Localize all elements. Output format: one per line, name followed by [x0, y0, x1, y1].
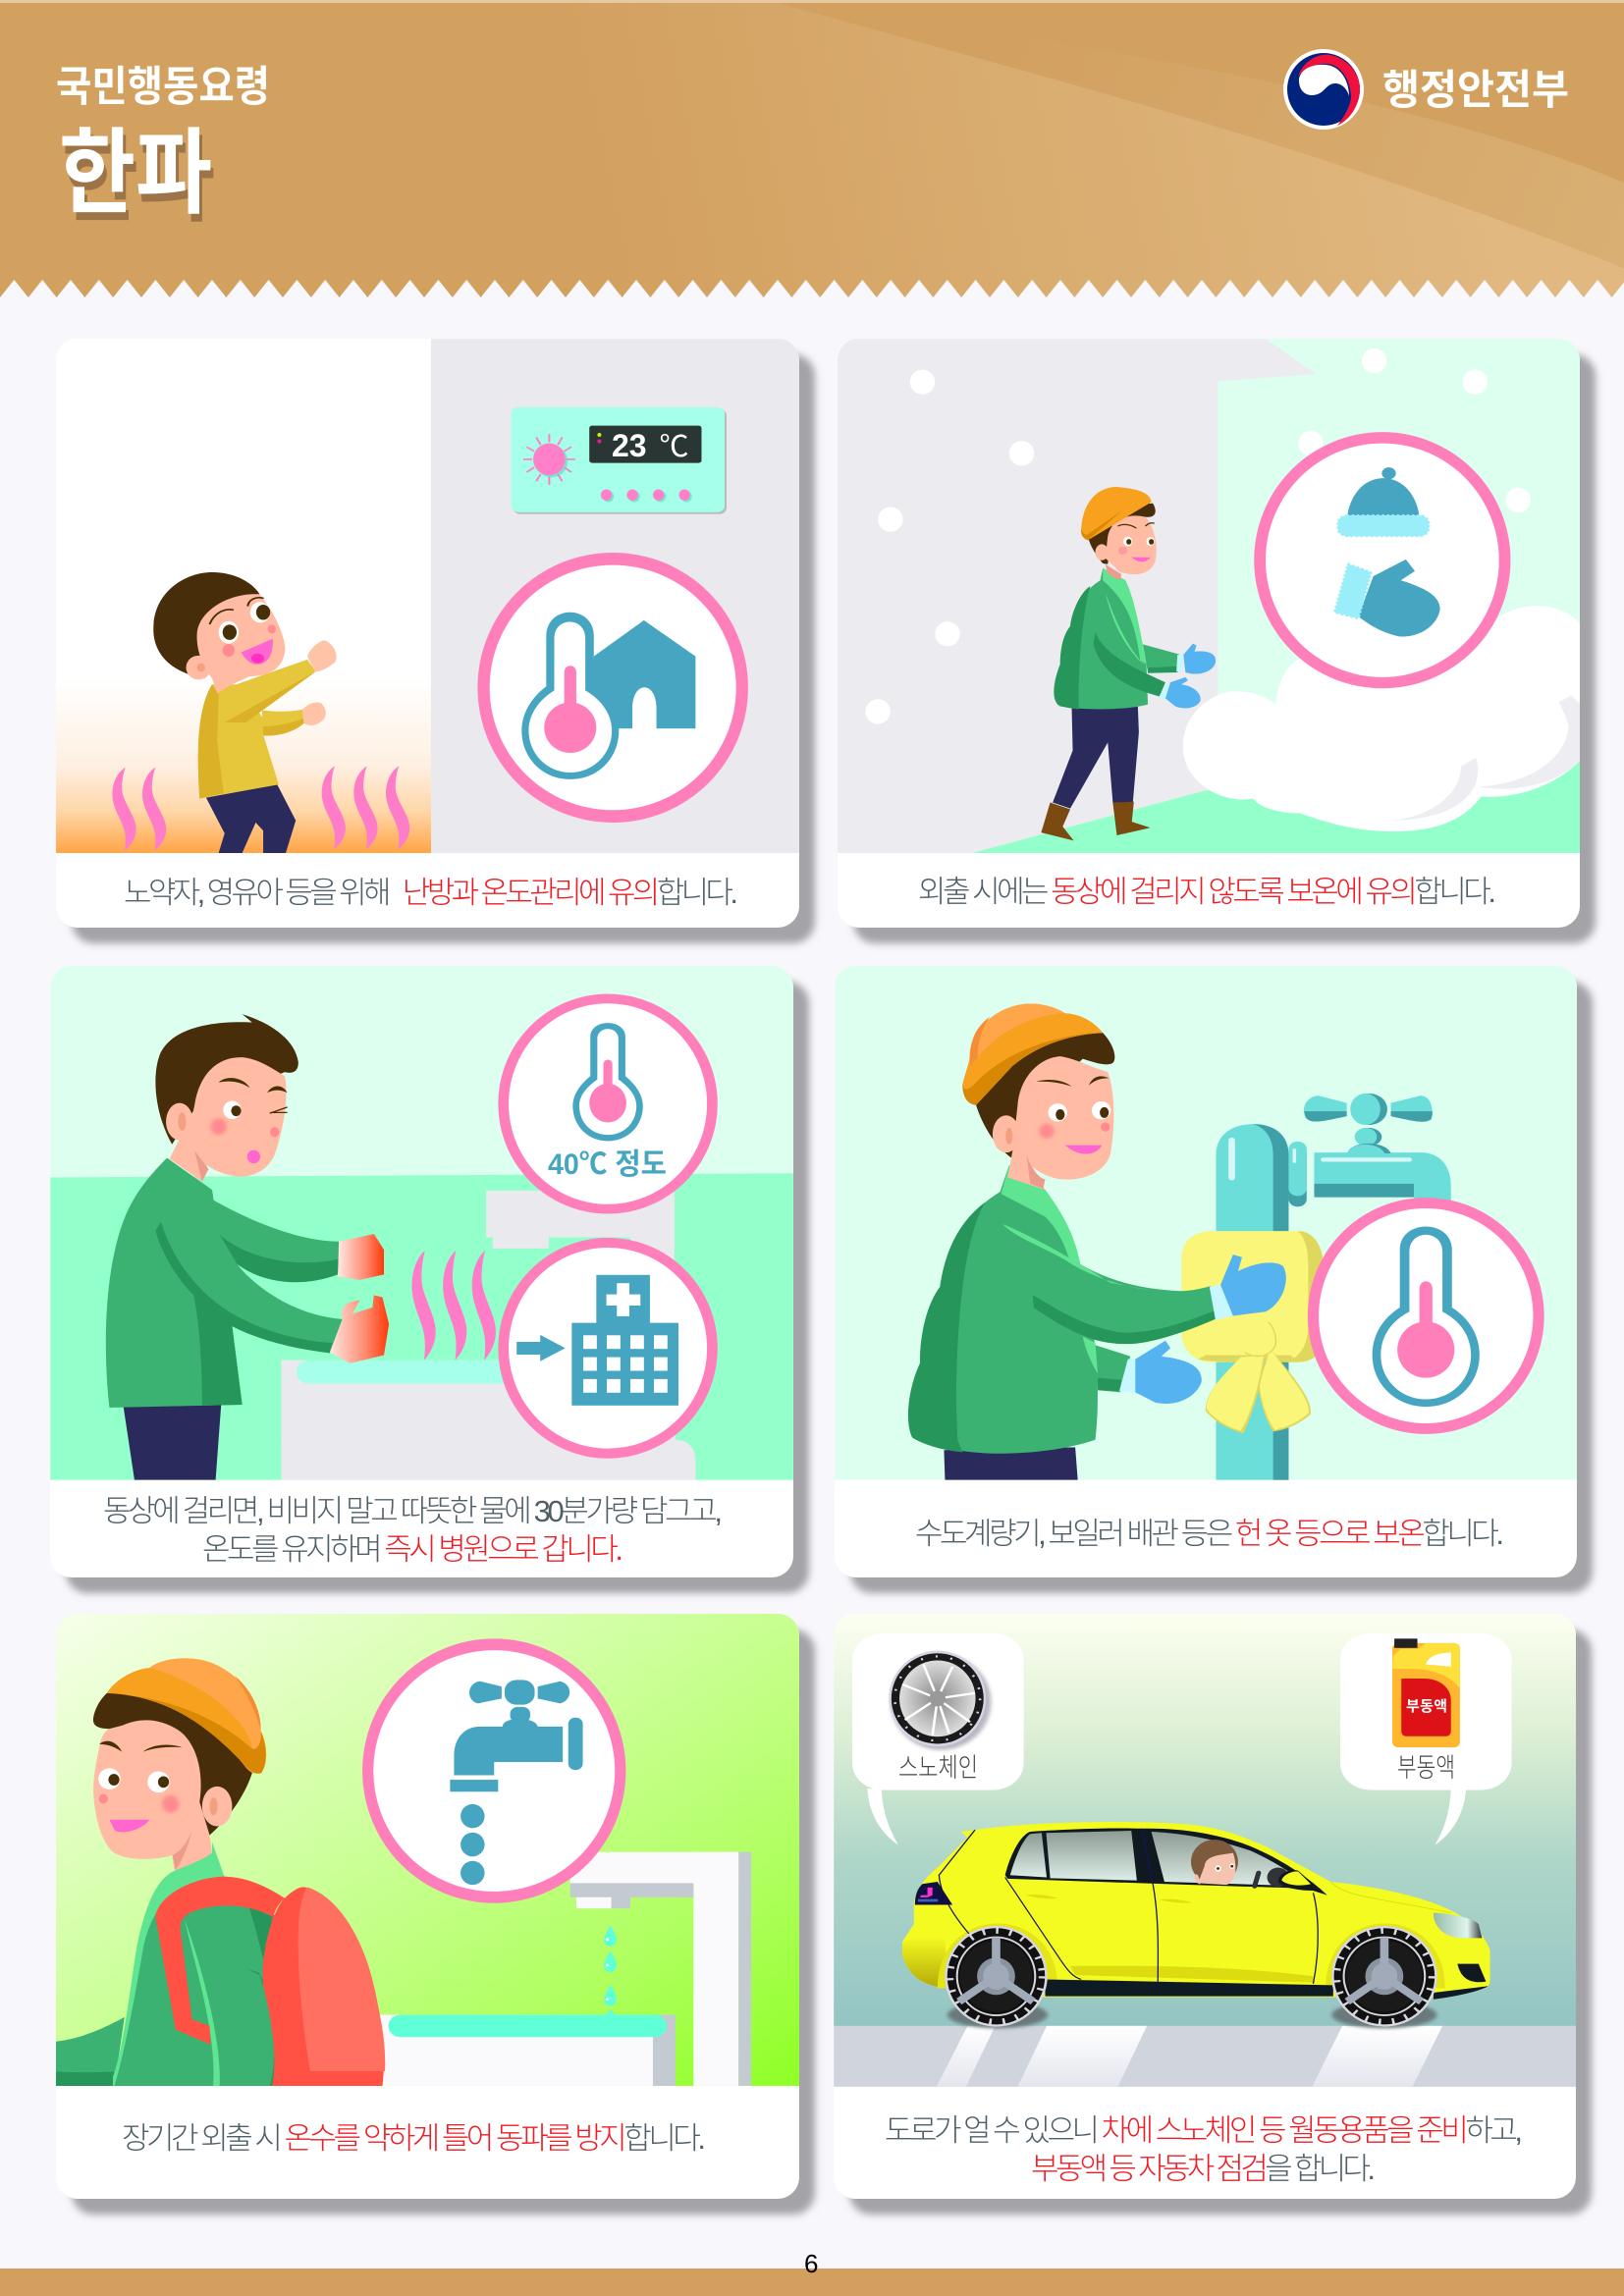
icon: thermometer — [1308, 1198, 1544, 1434]
driver — [1191, 1840, 1238, 1885]
caption: 장기간 외출 시 온수를 약하게 틀어 동파를 방지합니다. — [122, 2121, 706, 2156]
icon: hat and mitten — [1254, 432, 1510, 688]
illustration: person in warm room — [56, 339, 799, 853]
icon: dripping faucet — [362, 1638, 625, 1903]
title with shadow: 한파 — [59, 122, 212, 226]
caption: 노약자, 영유아 등을 위해 난방과 온도관리에 유의합니다. — [124, 876, 738, 910]
character: winking person — [106, 1014, 389, 1480]
illustration: wrapping a pipe — [835, 966, 1578, 1480]
character: person with red backpack — [56, 1658, 385, 2086]
illustration: car on snowy road — [834, 1614, 1577, 2087]
thermometer label: 40℃ 정도 — [548, 1148, 667, 1181]
thermostat body — [512, 407, 727, 514]
character: walking person — [1041, 487, 1216, 840]
heat waves — [112, 766, 409, 851]
caption — [103, 1494, 723, 1567]
bottom band — [0, 2269, 1624, 2296]
bottle label text: 부동액 — [1406, 1698, 1447, 1715]
logo: taegeuk mark — [1283, 49, 1364, 130]
panel: hot water trickle — [56, 1614, 815, 2215]
road and crosswalk — [834, 2026, 1577, 2087]
wash basin and faucet — [281, 1191, 695, 1480]
warm water steam — [412, 1251, 496, 1361]
header band — [0, 0, 1624, 297]
page number: 6 — [804, 2249, 818, 2278]
caption: 온도를 유지하며 즉시 병원으로 갑니다. — [202, 1532, 623, 1567]
water drops — [604, 1925, 617, 2005]
title with shadow: 한파 — [62, 130, 215, 234]
panel: heating and temperature — [56, 339, 815, 943]
wheels with snow chains — [945, 1926, 1436, 2026]
caption: 외출 시에는 동상에 걸리지 않도록 보온에 유의합니다. — [918, 875, 1496, 909]
snowflakes — [865, 348, 1531, 724]
cloth wrap — [1181, 1231, 1324, 1433]
icon: thermometer and house — [477, 553, 748, 823]
panel: frostbite care — [50, 966, 809, 1593]
car — [902, 1822, 1490, 2028]
illustration: person in snow — [838, 339, 1581, 853]
illustration: warming hands — [50, 966, 793, 1480]
icon: 40 degree thermometer — [498, 994, 718, 1213]
faucet and sink — [380, 1852, 751, 2086]
thermostat reading: 23 ℃ — [612, 428, 688, 463]
caption: 부동액 등 자동차 점검을 합니다. — [1031, 2152, 1376, 2186]
speech bubble: antifreeze — [1340, 1633, 1511, 1845]
character: person with orange hat — [908, 1003, 1286, 1480]
icon: hospital — [498, 1238, 718, 1459]
subtitle: 국민행동요령 — [56, 64, 270, 111]
panel: wrapping the water meter — [835, 966, 1593, 1593]
panel: keep warm outdoors — [838, 339, 1596, 943]
panel: winter car preparation — [834, 1614, 1592, 2215]
caption: 수도계량기, 보일러 배관 등은 헌 옷 등으로 보온합니다. — [915, 1517, 1504, 1551]
caption: 동상에 걸리면, 비비지 말고 따뜻한 물에 30분가량 담그고, — [103, 1494, 723, 1528]
label: snow chain: 스노체인 — [898, 1753, 978, 1783]
logo: ministry name: 행정안전부 — [1382, 67, 1569, 113]
speech bubble: snow chain — [852, 1633, 1024, 1845]
caption — [885, 2113, 1523, 2186]
illustration: person with backpack and dripping tap — [56, 1614, 799, 2086]
water pipe and faucet — [1216, 1094, 1451, 1480]
caption: 도로가 얼 수 있으니 차에 스노체인 등 월동용품을 준비하고, — [885, 2113, 1523, 2148]
label: antifreeze: 부동액 — [1397, 1753, 1455, 1783]
snow pile — [1183, 606, 1581, 831]
character: child in yellow sweater — [153, 572, 337, 853]
